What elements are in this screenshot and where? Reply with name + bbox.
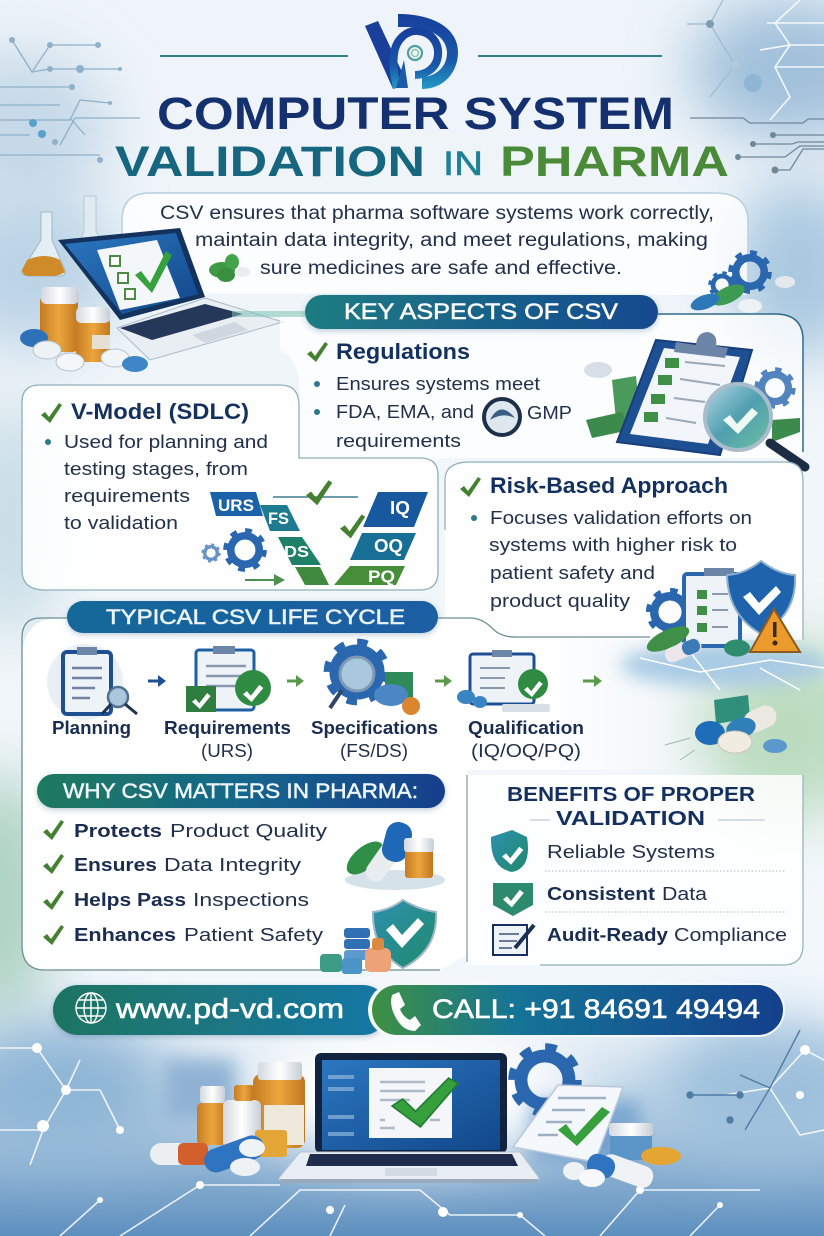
benefit: audit-ready compliance [493, 925, 787, 955]
list: why csv matters: Product Quality [170, 821, 327, 841]
label: (FS/DS) [340, 741, 408, 761]
panel: v-model [22, 385, 438, 590]
arrow 3 [435, 675, 452, 687]
risk text: systems with higher risk to [489, 535, 737, 555]
intro text: sure medicines are safe and effective. [260, 258, 622, 279]
v-model diagram: DS [284, 544, 309, 561]
illustration: bottom pills and bottles [150, 1060, 305, 1176]
panel: life cycle [22, 618, 803, 970]
illustration: pills right [665, 695, 787, 760]
v-model text [45, 432, 268, 533]
v-model diagram: PQ [368, 567, 395, 586]
list: why csv matters [43, 820, 327, 945]
check: risk [460, 477, 481, 497]
heading pill: key aspects [305, 295, 658, 329]
circuit nodes top [9, 20, 778, 174]
logo [365, 14, 458, 89]
contact: phone pill: CALL: +91 84691 49494 [432, 994, 760, 1024]
illustration: clipboard and magnifier [584, 332, 805, 467]
logo side rules [160, 55, 662, 57]
title: VALIDATION [115, 138, 425, 186]
v-model diagram: URS [218, 496, 254, 515]
intro text [160, 203, 714, 279]
label: Specifications [311, 718, 438, 738]
illustration: shield and stack [320, 900, 436, 974]
list: why csv matters: Data Integrity [164, 855, 301, 875]
arrow 4 [583, 675, 602, 687]
life-cycle step: requirements [164, 646, 291, 761]
heading: risk: Risk-Based Approach [490, 473, 728, 498]
heading pill: why csv matters [37, 774, 445, 808]
benefit: consistent data [493, 883, 708, 916]
arrow 1 [148, 675, 166, 687]
v-model diagram [203, 480, 428, 586]
life-cycle step: qualification [457, 650, 584, 761]
arrow 2 [287, 675, 304, 687]
contact: website pill [53, 985, 388, 1035]
benefit: reliable systems [491, 830, 715, 872]
list: why csv matters: Helps Pass [74, 890, 186, 910]
heading: benefits: BENEFITS OF PROPER [507, 784, 756, 806]
list: why csv matters: Protects [74, 821, 162, 841]
illustration: pills and bottle [341, 819, 445, 890]
v-model diagram: IQ [390, 498, 410, 518]
panel: intro [122, 193, 748, 295]
life-cycle step: planning [47, 644, 137, 738]
title: IN [443, 145, 483, 183]
regulations bullets [314, 374, 572, 451]
list: why csv matters: Ensures [74, 855, 157, 875]
label: (URS) [201, 741, 253, 761]
panel: risk-based [445, 462, 803, 640]
v-model text: testing stages, from [64, 459, 248, 479]
life-cycle step: specifications [311, 643, 438, 761]
illustration: laptop top left [20, 196, 283, 372]
v-model text: to validation [64, 513, 178, 533]
icon: globe [76, 993, 106, 1023]
label [164, 718, 291, 761]
label [468, 718, 584, 761]
benefit: audit-ready compliance: Audit-Ready [547, 925, 668, 945]
check: regulations [307, 342, 328, 362]
label: Qualification [468, 718, 584, 738]
benefit: consistent data: Consistent [547, 884, 655, 904]
network accent bottom right [687, 1030, 800, 1130]
v-model text: requirements [64, 486, 190, 506]
list: why csv matters: Patient Safety [184, 925, 323, 945]
label: Requirements [164, 718, 291, 738]
illustration: risk floor [620, 643, 824, 690]
intro text: CSV ensures that pharma software systems work correctly, [160, 203, 714, 224]
regulations bullets: Ensures systems meet [336, 374, 540, 394]
v-model diagram: FS [268, 509, 289, 528]
heading pill: why csv matters: WHY CSV MATTERS IN PHARMA: [63, 780, 418, 803]
v-model text: Used for planning and [64, 432, 268, 452]
heading pill: typical csv life cycle [67, 601, 438, 633]
label [311, 718, 438, 761]
contact: website pill: www.pd-vd.com [115, 993, 344, 1024]
title: COMPUTER SYSTEM [157, 88, 674, 139]
heading: benefits: VALIDATION [556, 808, 705, 830]
label: Planning [52, 718, 131, 738]
circuit network bottom [0, 1048, 824, 1236]
illustration: bottom laptop [279, 1053, 539, 1183]
panel: benefits [467, 775, 803, 965]
circuit lines decoration top [0, 0, 824, 170]
contact: phone pill [368, 983, 785, 1037]
list: why csv matters: Enhances [74, 925, 176, 945]
risk text [471, 508, 752, 611]
icon: seal [484, 399, 520, 435]
regulations bullets: FDA, EMA, and [336, 402, 474, 422]
icon: phone [391, 992, 421, 1031]
heading: v-model: V-Model (SDLC) [71, 399, 249, 424]
benefit: audit-ready compliance: Compliance [674, 925, 787, 945]
risk text: Focuses validation efforts on [490, 508, 752, 528]
regulations bullets: GMP [527, 403, 572, 423]
heading: benefits [507, 784, 756, 830]
illustration: bottom gear and right document [513, 1048, 681, 1191]
title [115, 88, 729, 186]
circuit nodes bottom [32, 1043, 810, 1218]
benefit: reliable systems: Reliable Systems [547, 842, 715, 862]
regulations bullets: requirements [336, 431, 461, 451]
risk text: patient safety and [490, 563, 655, 583]
risk text: product quality [490, 591, 630, 611]
check: v-model [41, 403, 62, 423]
benefit: consistent data: Data [662, 884, 708, 904]
illustration: gears and pills top right [689, 253, 795, 314]
heading: regulations: Regulations [336, 339, 470, 364]
intro text: maintain data integrity, and meet regulations, making [195, 230, 708, 251]
label: (IQ/OQ/PQ) [471, 741, 581, 761]
heading pill: typical csv life cycle: TYPICAL CSV LIFE CYCLE [106, 606, 405, 629]
v-model diagram: OQ [374, 536, 403, 556]
title: PHARMA [500, 138, 729, 186]
panel: regulations [232, 314, 803, 462]
heading pill: key aspects: KEY ASPECTS OF CSV [344, 299, 618, 324]
illustration: risk shield and clipboard [643, 561, 800, 665]
list: why csv matters: Inspections [193, 890, 309, 910]
